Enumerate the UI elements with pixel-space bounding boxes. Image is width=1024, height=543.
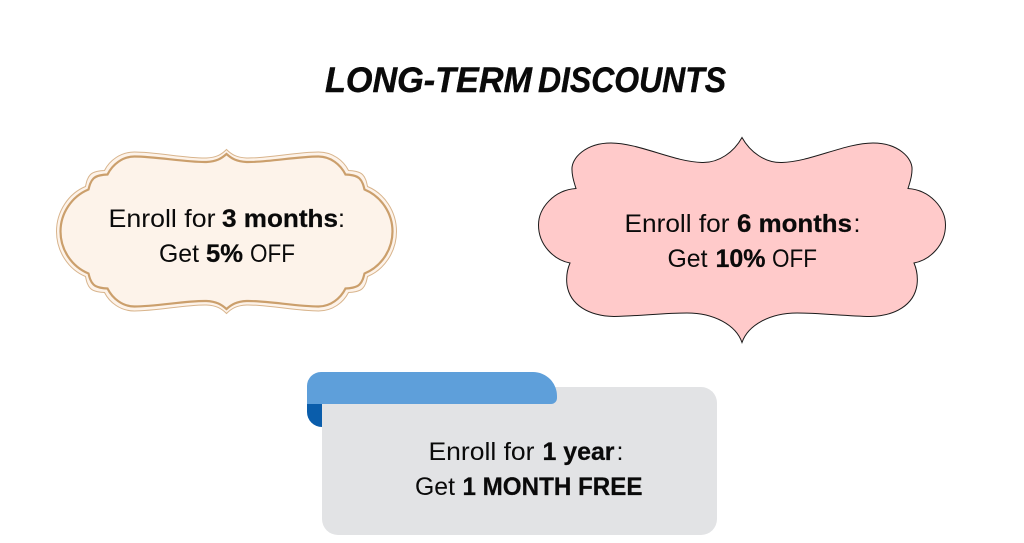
badge shape: cream frame: [56, 150, 396, 314]
card text line 2: 1 MONTH FREE: [462, 473, 642, 501]
title: [325, 61, 726, 100]
card text line 1: Enroll for: [428, 438, 534, 466]
title: DISCOUNTS: [538, 61, 726, 100]
badge text line 1: 3 months: [222, 205, 338, 233]
badge text line 1: :: [338, 205, 345, 233]
panel: 1 year card: [307, 372, 717, 535]
title: LONG-TERM: [325, 61, 533, 100]
badge text line 1: Enroll for: [108, 205, 216, 233]
card text line 1: [428, 438, 623, 466]
badge text line 1: [108, 205, 345, 233]
badge text line 2: OFF: [772, 245, 817, 273]
card ribbon: blue: [307, 372, 557, 404]
badge text line 2: 5%: [206, 240, 243, 268]
badge text line 1: [624, 210, 860, 238]
badge text line 2: OFF: [250, 240, 295, 268]
badge text line 1: Enroll for: [624, 210, 730, 238]
card body: grey: [322, 387, 717, 535]
card folded tab: dark blue: [307, 400, 330, 427]
card text line 2: Get: [415, 473, 455, 501]
card text line 1: 1 year: [542, 438, 615, 466]
badge text line 2: [668, 245, 817, 273]
badge text line 2: Get: [159, 240, 199, 268]
panel: 3 months badge: [56, 150, 396, 314]
badge text line 2: 10%: [716, 245, 766, 273]
badge text line 2: [159, 240, 295, 268]
card text line 1: :: [616, 438, 623, 466]
badge shape: pink: [538, 138, 946, 342]
panel: 6 months badge: [538, 138, 946, 342]
badge text line 1: :: [854, 210, 860, 238]
badge text line 1: 6 months: [737, 210, 852, 238]
badge text line 2: Get: [668, 245, 708, 273]
